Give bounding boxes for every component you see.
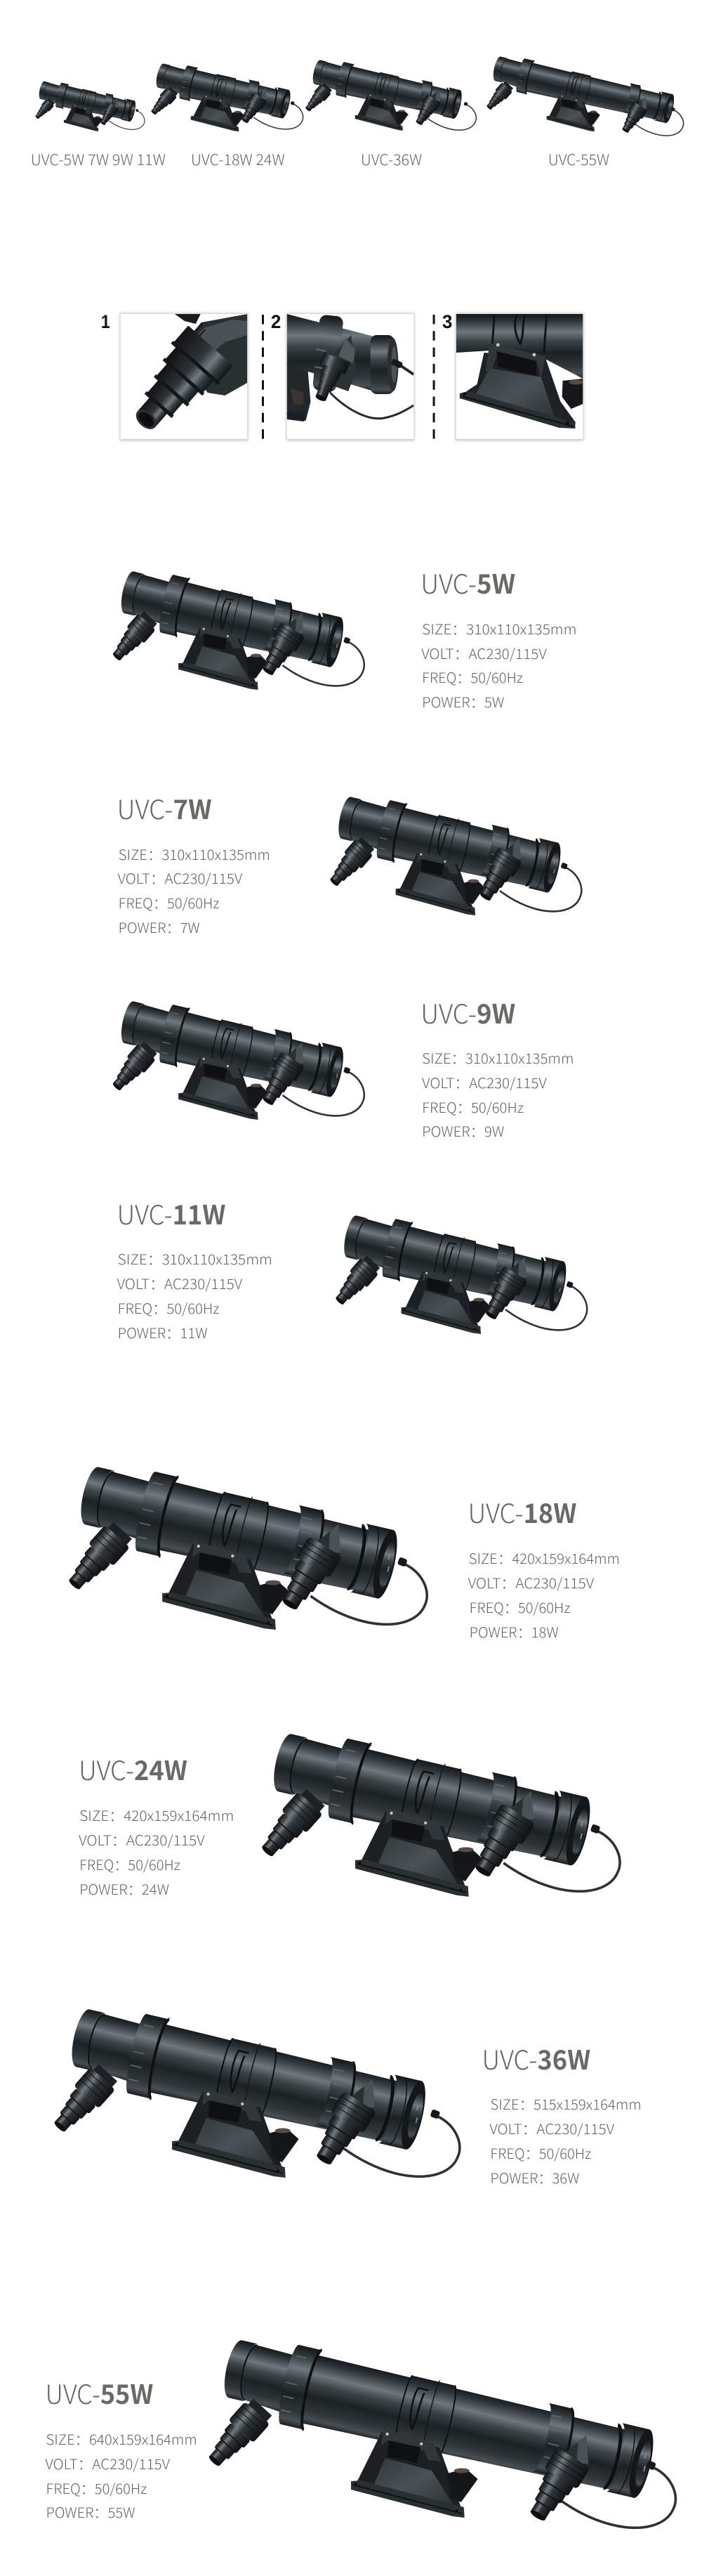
spec list: UVC-18W: FREQ：50/60Hz — [470, 1597, 571, 1617]
spec list: UVC-36W: VOLT：AC230/115V — [489, 2118, 614, 2138]
spec list: UVC-5W: POWER：5W — [422, 691, 504, 712]
spec list: UVC-24W: VOLT：AC230/115V — [79, 1829, 205, 1850]
heading: UVC-5W: UVC-5W — [420, 563, 515, 601]
product photo: UVC-9W — [107, 994, 364, 1120]
product photo: UVC-55W — [483, 52, 684, 136]
spec list: UVC-9W: FREQ：50/60Hz — [422, 1097, 524, 1117]
panel: UVC-55W — [45, 2330, 675, 2528]
spec list: UVC-11W: VOLT：AC230/115V — [117, 1273, 242, 1293]
panel: UVC-24W — [79, 1724, 620, 1899]
spec list: UVC-9W: POWER：9W — [422, 1120, 504, 1141]
spec list: UVC-55W: FREQ：50/60Hz — [46, 2478, 147, 2498]
panel: UVC-5W — [107, 563, 576, 712]
spec list: UVC-9W: VOLT：AC230/115V — [422, 1072, 547, 1092]
spec list: UVC-55W: SIZE：640x159x164mm — [46, 2428, 197, 2449]
product photo: UVC-36W — [46, 1999, 460, 2178]
detail photo 2: outlet and power cable — [286, 313, 414, 440]
spec list: UVC-7W: SIZE：310x110x135mm — [119, 844, 270, 864]
spec list: UVC-9W — [422, 1047, 574, 1141]
spec list: UVC-7W: POWER：7W — [119, 917, 200, 937]
spec list: UVC-55W: POWER：55W — [46, 2502, 135, 2522]
product photo: UVC-36W — [302, 55, 476, 131]
heading: UVC-18W: UVC-18W — [468, 1492, 576, 1531]
panel: detail photos — [101, 311, 583, 446]
spec list: UVC-55W: VOLT：AC230/115V — [45, 2453, 170, 2473]
spec list: UVC-55W — [45, 2428, 197, 2522]
detail photo 1: stepped hose connector — [118, 313, 248, 446]
spec list: UVC-7W: VOLT：AC230/115V — [118, 868, 242, 888]
label: UVC-18W 24W: UVC-18W 24W — [191, 149, 285, 170]
label: UVC-55W: UVC-55W — [548, 149, 609, 170]
spec list: UVC-18W: SIZE：420x159x164mm — [469, 1548, 620, 1568]
product photo: UVC-18W 24W — [147, 59, 303, 131]
spec list: UVC-18W: VOLT：AC230/115V — [468, 1572, 594, 1593]
spec list: UVC-24W — [79, 1805, 234, 1899]
product photo: UVC-5W — [107, 564, 364, 690]
number 2: 2 — [271, 311, 281, 332]
dashed divider 1 — [262, 315, 264, 439]
product photo: UVC-7W — [324, 790, 581, 915]
heading: UVC-7W: UVC-7W — [117, 788, 212, 827]
dashed divider 2 — [433, 315, 435, 439]
spec list: UVC-24W: POWER：24W — [79, 1878, 169, 1899]
spec list: UVC-5W: VOLT：AC230/115V — [421, 643, 547, 663]
product photo: UVC-24W — [253, 1724, 620, 1897]
spec list: UVC-36W: SIZE：515x159x164mm — [490, 2093, 642, 2114]
spec list: UVC-24W: FREQ：50/60Hz — [79, 1854, 180, 1874]
spec list: UVC-5W: FREQ：50/60Hz — [422, 667, 523, 687]
number 3: 3 — [442, 311, 452, 332]
heading: UVC-24W: UVC-24W — [79, 1749, 187, 1788]
spec list: UVC-7W: FREQ：50/60Hz — [119, 892, 220, 913]
product photo: UVC-5W 7W 9W 11W — [33, 78, 145, 131]
panel: UVC-36W — [46, 1999, 642, 2188]
heading: UVC-55W: UVC-55W — [45, 2373, 153, 2412]
number 1: 1 — [101, 311, 110, 332]
detail photo 3: mounting bracket — [456, 313, 583, 440]
spec list: UVC-18W — [468, 1548, 620, 1642]
spec list: UVC-11W — [117, 1248, 272, 1342]
spec list: UVC-11W: SIZE：310x110x135mm — [118, 1248, 272, 1269]
spec list: UVC-36W — [489, 2093, 642, 2188]
spec list: UVC-5W: SIZE：310x110x135mm — [422, 618, 576, 639]
product photo: UVC-55W — [201, 2330, 675, 2528]
label: UVC-36W: UVC-36W — [361, 149, 422, 170]
panel: UVC-18W — [60, 1457, 620, 1642]
heading: UVC-36W: UVC-36W — [482, 2039, 590, 2077]
spec list: UVC-11W: POWER：11W — [118, 1322, 208, 1342]
product photo: UVC-11W — [330, 1208, 587, 1334]
spec list: UVC-24W: SIZE：420x159x164mm — [79, 1805, 234, 1825]
spec list: UVC-36W: POWER：36W — [490, 2167, 579, 2188]
panel: UVC-7W — [117, 788, 581, 937]
spec list: UVC-7W — [118, 844, 270, 937]
label: UVC-5W 7W 9W 11W: UVC-5W 7W 9W 11W — [31, 149, 166, 170]
panel: UVC-9W — [107, 993, 574, 1141]
spec list: UVC-36W: FREQ：50/60Hz — [490, 2143, 591, 2163]
spec list: UVC-9W: SIZE：310x110x135mm — [422, 1047, 574, 1068]
spec list: UVC-5W — [421, 618, 576, 712]
heading: UVC-11W: UVC-11W — [117, 1194, 225, 1232]
panel: product range overview — [31, 52, 684, 170]
spec list: UVC-11W: FREQ：50/60Hz — [118, 1297, 220, 1318]
spec list: UVC-18W: POWER：18W — [470, 1621, 559, 1642]
panel: UVC-11W — [117, 1194, 587, 1342]
product photo: UVC-18W — [60, 1457, 427, 1630]
heading: UVC-9W: UVC-9W — [420, 993, 515, 1031]
